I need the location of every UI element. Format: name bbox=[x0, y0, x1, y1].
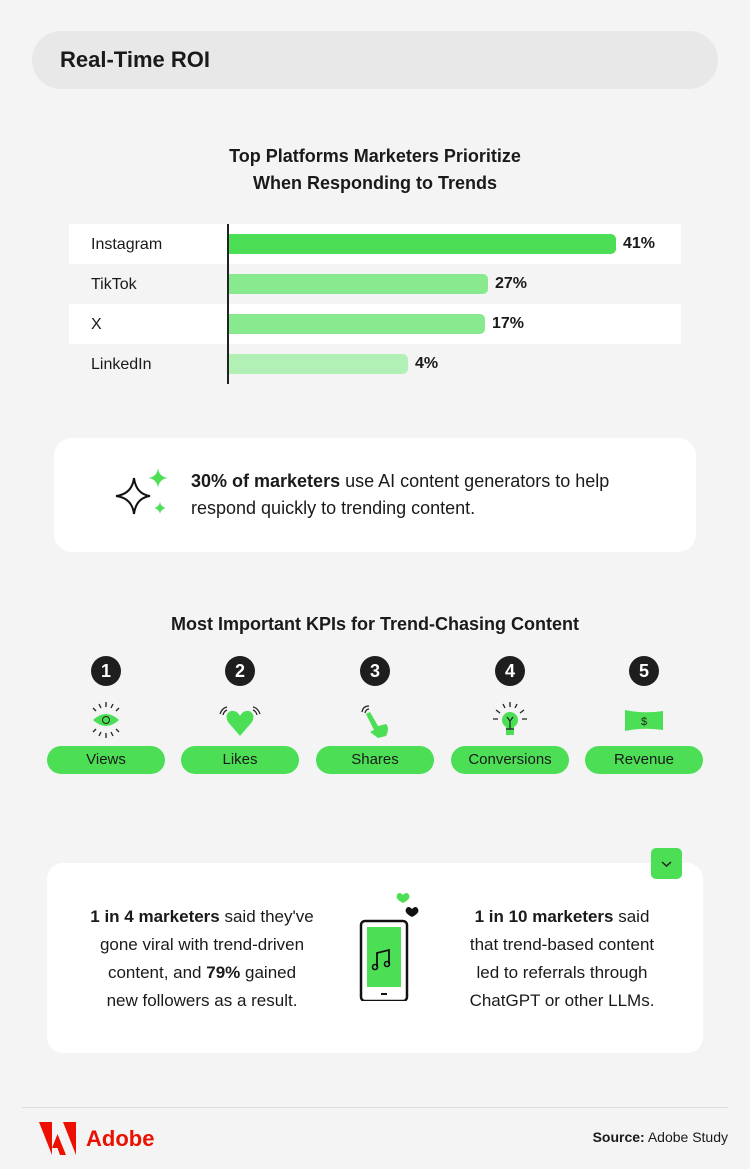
icon: chevron button bbox=[651, 848, 682, 879]
text: 1 in 10: ChatGPT or other LLMs. bbox=[470, 991, 654, 1010]
text: 1 in 4: new followers as a result. bbox=[107, 991, 297, 1010]
KPI: Shares: 3 bbox=[370, 661, 380, 681]
callout: AI bbox=[54, 438, 696, 552]
chart title: When Responding to Trends bbox=[253, 173, 497, 193]
row: LinkedIn: LinkedIn bbox=[91, 356, 152, 373]
KPI: Shares bbox=[316, 656, 434, 774]
text: 1 in 4 bbox=[90, 907, 314, 1010]
text: 30% of marketers use AI content generators to help respond quickly to trending content. bbox=[191, 471, 609, 518]
text: 1 in 10 bbox=[470, 907, 654, 1010]
KPI: Likes: 2 bbox=[235, 661, 245, 681]
title bar: Real-Time ROI bbox=[60, 47, 210, 72]
KPI: Revenue bbox=[585, 656, 703, 774]
row: TikTok bbox=[91, 274, 527, 294]
row: LinkedIn bbox=[91, 354, 438, 374]
KPI: Views bbox=[47, 656, 165, 774]
text: 1 in 10: that trend-based content bbox=[470, 935, 654, 954]
KPI title: Most Important KPIs for Trend-Chasing Content bbox=[171, 614, 579, 634]
row: X bbox=[69, 304, 681, 344]
panel: viral stats bbox=[47, 863, 703, 1053]
text: 1 in 4: 1 in 4 marketers said they've bbox=[90, 907, 314, 926]
text: 1 in 10: 1 in 10 marketers said bbox=[475, 907, 649, 926]
bar chart bbox=[69, 224, 681, 384]
row: LinkedIn: 4% bbox=[415, 355, 438, 372]
row: Instagram: Instagram bbox=[91, 236, 162, 253]
logo: Adobe bbox=[39, 1122, 154, 1155]
row: X: X bbox=[91, 316, 102, 333]
chart title: Top Platforms Marketers Prioritize bbox=[229, 146, 521, 166]
divider bbox=[22, 1107, 728, 1108]
logo: Adobe: Adobe bbox=[86, 1126, 154, 1151]
title bar bbox=[32, 31, 718, 89]
KPI: Revenue: Revenue bbox=[614, 751, 674, 768]
KPI: Conversions bbox=[451, 656, 569, 774]
KPI: Views: 1 bbox=[101, 661, 111, 681]
row: TikTok: 27% bbox=[495, 275, 527, 292]
KPI: Revenue: $ bbox=[641, 716, 647, 728]
text: 1 in 4: content, and 79% gained bbox=[108, 963, 296, 982]
KPI: Shares: Shares bbox=[351, 751, 399, 768]
row: X: 17% bbox=[492, 315, 524, 332]
source: Source: Adobe Study bbox=[593, 1129, 728, 1145]
row: Instagram: 41% bbox=[623, 235, 655, 252]
row: Instagram bbox=[69, 224, 681, 264]
KPI: Conversions: 4 bbox=[505, 661, 515, 681]
KPI: Likes: Likes bbox=[222, 751, 258, 768]
row: TikTok: TikTok bbox=[91, 276, 137, 293]
text: 1 in 10: led to referrals through bbox=[476, 963, 648, 982]
KPI: Revenue: 5 bbox=[639, 661, 649, 681]
icon: sparkles bbox=[116, 468, 168, 514]
text: 1 in 4: gone viral with trend-driven bbox=[100, 935, 304, 954]
KPI: Views: Views bbox=[86, 751, 126, 768]
KPI: Conversions: Conversions bbox=[468, 751, 552, 768]
icon: phone bbox=[360, 893, 418, 1001]
KPI: Likes bbox=[181, 656, 299, 774]
chart title bbox=[229, 146, 521, 193]
